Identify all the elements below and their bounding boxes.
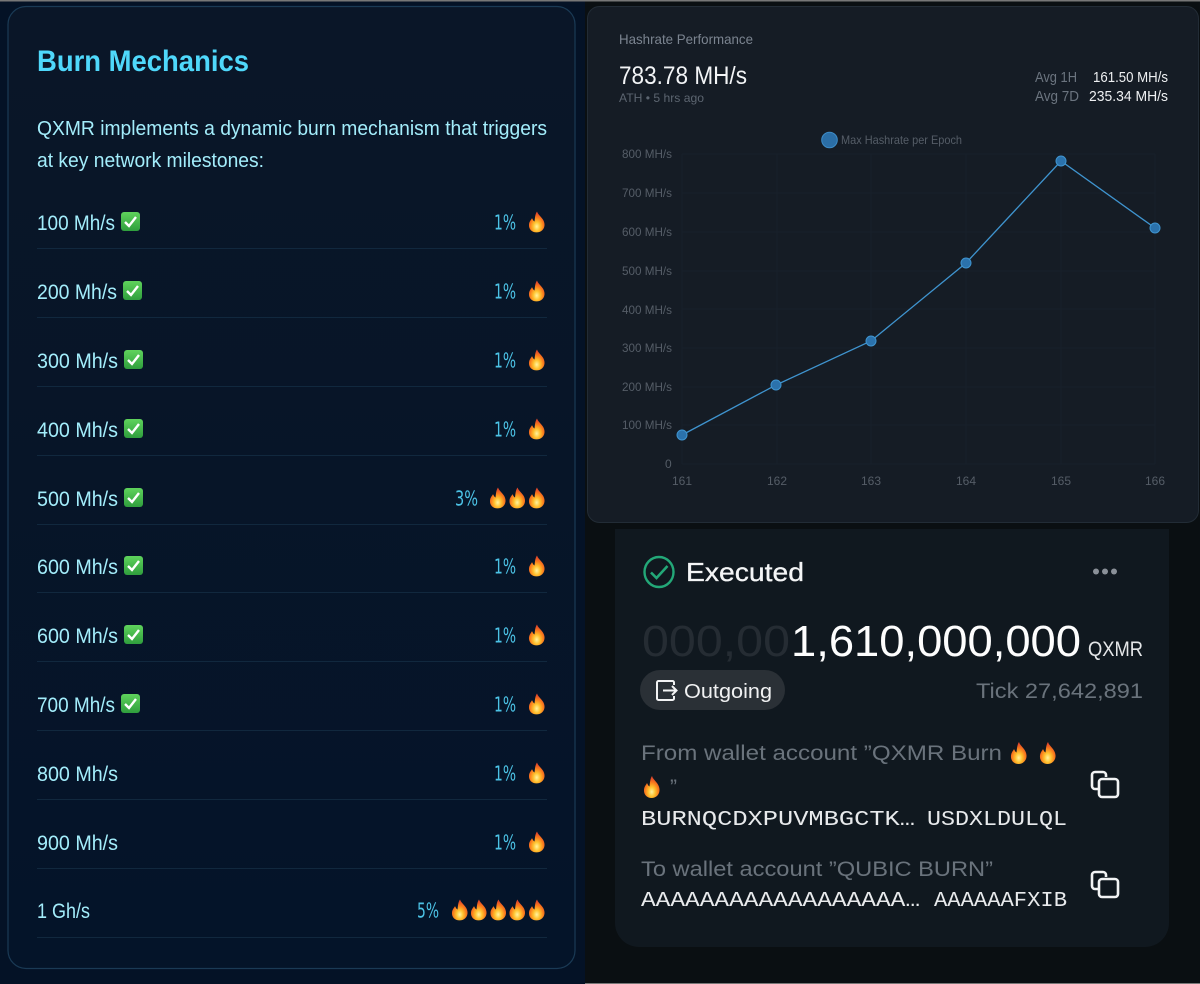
stat: averages: Avg 1H — [1035, 70, 1077, 86]
stat: all time high — [619, 62, 747, 105]
row: 300 Mh/s: 1% — [494, 348, 516, 372]
from wallet account: BURNQCDXPUVMBGCTK… — [641, 808, 915, 832]
x axis labels: 161 — [672, 474, 692, 488]
row: 500 Mh/s: 3% — [455, 486, 478, 510]
row: 900 Mh/s: 900 Mh/s — [37, 832, 118, 855]
from wallet account: USDXLDULQL — [927, 808, 1067, 832]
y axis labels: 100 MH/s — [622, 418, 672, 432]
row: 200 Mh/s — [37, 280, 547, 318]
data line — [682, 161, 1155, 435]
amount — [642, 617, 1143, 666]
icon: executed check — [644, 557, 674, 587]
intro text: at key network milestones: — [37, 149, 264, 172]
intro text: QXMR implements a dynamic burn mechanism that triggers — [37, 117, 547, 140]
stat: averages — [1035, 70, 1168, 105]
row: 600 Mh/s second — [37, 624, 547, 662]
badge: outgoing — [640, 670, 785, 710]
row: 400 Mh/s: 400 Mh/s — [37, 419, 118, 442]
row: 200 Mh/s: 1% — [494, 280, 516, 304]
from wallet account — [641, 741, 1067, 832]
row: 600 Mh/s — [37, 554, 547, 593]
row: 600 Mh/s: 1% — [494, 554, 516, 578]
tick number: Tick 27,642,891 — [976, 679, 1143, 703]
row: 700 Mh/s: 700 Mh/s — [37, 694, 115, 717]
row: 500 Mh/s — [37, 486, 547, 525]
row: 800 Mh/s: 800 Mh/s — [37, 763, 118, 786]
x axis labels — [672, 474, 1165, 488]
stat: all time high: ATH • 5 hrs ago — [619, 91, 704, 105]
row: 600 Mh/s second: 600 Mh/s — [37, 625, 118, 648]
to wallet account: AAAAAAAAAAAAAAAAAA… — [641, 889, 920, 913]
status: Executed: Executed — [686, 557, 804, 587]
row: 600 Mh/s: 600 Mh/s — [37, 556, 118, 579]
y axis labels — [622, 147, 672, 471]
row: 800 Mh/s — [37, 762, 547, 800]
y axis labels: 0 — [665, 457, 672, 471]
from wallet account: From wallet account ”QXMR Burn — [641, 741, 1002, 765]
y axis labels: 500 MH/s — [622, 264, 672, 278]
y axis labels: 700 MH/s — [622, 186, 672, 200]
row: 1 Gh/s — [37, 898, 547, 938]
to wallet account: To wallet account ”QUBIC BURN” — [641, 857, 993, 881]
amount: 000,00 — [642, 617, 790, 666]
row: 900 Mh/s — [37, 830, 547, 869]
panel: hashrate performance — [588, 6, 1198, 522]
row: 100 Mh/s: 1% — [494, 210, 516, 234]
icon: copy from address — [1092, 772, 1118, 797]
intro text — [37, 117, 547, 172]
x axis labels: 164 — [956, 474, 976, 488]
row: 600 Mh/s second: 1% — [494, 624, 516, 648]
data points — [677, 156, 1160, 440]
amount: QXMR — [1088, 638, 1143, 661]
y axis labels: 400 MH/s — [622, 303, 672, 317]
stat: averages: 235.34 MH/s — [1089, 89, 1168, 105]
from wallet account: ” — [670, 776, 677, 799]
right page background — [585, 0, 1200, 984]
icon: copy to address — [1092, 872, 1118, 897]
to wallet account — [641, 857, 1067, 913]
badge: outgoing: Outgoing — [684, 680, 772, 703]
row: 200 Mh/s: 200 Mh/s — [37, 281, 117, 304]
stat: averages: 161.50 MH/s — [1093, 70, 1168, 86]
x axis labels: 163 — [861, 474, 881, 488]
row: 300 Mh/s — [37, 348, 547, 387]
panel: burn mechanics — [8, 6, 575, 968]
row: 500 Mh/s: 500 Mh/s — [37, 488, 118, 511]
row: 100 Mh/s — [37, 210, 547, 249]
heading: Burn Mechanics: Burn Mechanics — [37, 45, 249, 78]
row: 1 Gh/s: 5% — [417, 898, 439, 922]
to wallet account: AAAAAAFXIB — [934, 889, 1067, 913]
heading: Hashrate Performance: Hashrate Performance — [619, 31, 753, 47]
row: 1 Gh/s: 1 Gh/s — [37, 900, 90, 923]
row: 100 Mh/s: 100 Mh/s — [37, 212, 115, 235]
row: 400 Mh/s: 1% — [494, 418, 516, 442]
stat: averages: Avg 7D — [1035, 89, 1079, 105]
row: 900 Mh/s: 1% — [494, 830, 516, 854]
panel: executed transaction — [615, 529, 1169, 947]
y axis labels: 300 MH/s — [622, 341, 672, 355]
stat: all time high: 783.78 MH/s — [619, 62, 747, 90]
y axis labels: 600 MH/s — [622, 225, 672, 239]
line chart: max hashrate per epoch — [622, 147, 1165, 488]
row: 700 Mh/s: 1% — [494, 692, 516, 716]
amount: 1,610,000,000 — [791, 617, 1081, 666]
x axis labels: 165 — [1051, 474, 1071, 488]
left page background — [0, 0, 585, 984]
x axis labels: 162 — [767, 474, 787, 488]
chart legend: Max Hashrate per Epoch — [841, 133, 962, 147]
row: 700 Mh/s — [37, 692, 547, 731]
y axis labels: 800 MH/s — [622, 147, 672, 161]
row: 300 Mh/s: 300 Mh/s — [37, 350, 118, 373]
x axis labels: 166 — [1145, 474, 1165, 488]
row: 400 Mh/s — [37, 418, 547, 456]
icon: more menu — [1093, 568, 1117, 574]
row: 800 Mh/s: 1% — [494, 762, 516, 786]
y axis labels: 200 MH/s — [622, 380, 672, 394]
